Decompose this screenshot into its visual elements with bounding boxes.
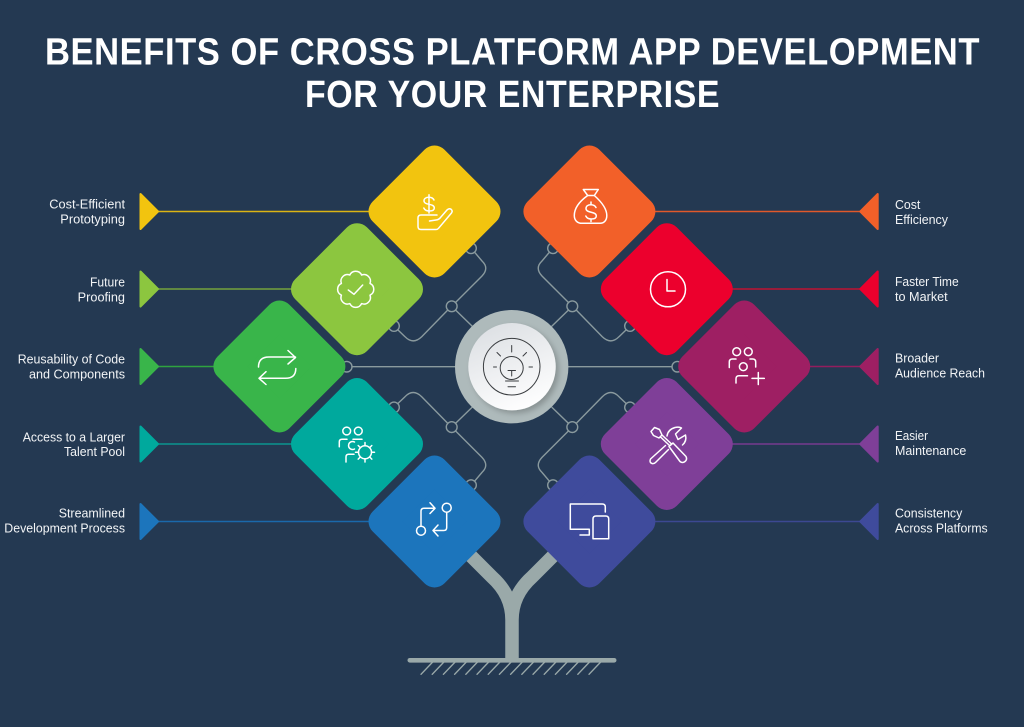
- icon: process flow: [416, 503, 451, 536]
- label: [78, 276, 125, 305]
- arrow marker: [140, 272, 158, 306]
- icon: crossed tools: [650, 427, 687, 464]
- icon: people with plus: [729, 348, 764, 384]
- item: Streamlined Development Process: [4, 470, 487, 574]
- leader line: [808, 366, 866, 368]
- label: Audience Reach: [895, 367, 985, 381]
- label: [895, 275, 959, 304]
- diamond: [615, 237, 719, 341]
- arrow marker: [860, 504, 878, 539]
- leader line: [654, 210, 866, 212]
- leader line: [158, 288, 293, 290]
- icon: repeat arrows: [258, 350, 296, 384]
- diamond: [305, 237, 409, 341]
- label: Proofing: [78, 291, 125, 305]
- label: Maintenance: [895, 444, 966, 458]
- diamond: [305, 392, 409, 496]
- label: Consistency: [895, 506, 963, 520]
- label: Broader: [895, 352, 939, 366]
- arrow marker: [860, 272, 878, 306]
- diamond: [537, 160, 641, 264]
- label: Faster Time: [895, 275, 959, 289]
- label: Cost-Efficient: [49, 198, 126, 212]
- item: Faster Time to Market: [615, 237, 959, 341]
- label: and Components: [29, 368, 125, 382]
- label: Talent Pool: [64, 445, 125, 459]
- arrow marker: [140, 504, 158, 539]
- label: [49, 198, 126, 227]
- title: [45, 32, 980, 116]
- icon: lightbulb: [483, 338, 540, 395]
- arrow marker: [860, 426, 878, 462]
- central hub with lightbulb: [455, 310, 568, 423]
- item: Reusability of Code and Components: [18, 314, 331, 418]
- item: Future Proofing: [78, 237, 409, 341]
- leader line: [158, 443, 293, 445]
- arrow marker: [140, 426, 158, 462]
- icon: devices: [570, 504, 609, 539]
- arrow marker: [860, 349, 878, 384]
- leader line: [158, 366, 215, 368]
- item: Consistency Across Platforms: [537, 470, 988, 574]
- item: Broader Audience Reach: [692, 314, 985, 418]
- label: Reusability of Code: [18, 353, 125, 367]
- item: Cost Efficiency: [537, 160, 949, 264]
- icon: hand with dollar: [418, 195, 452, 230]
- icon: money bag: [574, 190, 607, 223]
- diamond: [615, 392, 719, 496]
- label: Efficiency: [895, 213, 949, 227]
- icon: people with gear: [339, 427, 374, 462]
- label: [18, 353, 125, 382]
- label: Prototyping: [60, 213, 125, 227]
- label: Future: [90, 276, 125, 290]
- leader line: [731, 288, 866, 290]
- item: Easier Maintenance: [615, 392, 966, 496]
- label: [895, 506, 988, 535]
- label: Across Platforms: [895, 521, 988, 535]
- diamond: [537, 470, 641, 574]
- label: [895, 352, 985, 381]
- icon: badge check: [338, 271, 374, 307]
- label: Streamlined: [59, 506, 125, 520]
- tree trunk and ground: [408, 556, 616, 674]
- item: Access to a Larger Talent Pool: [23, 392, 409, 496]
- icon: clock: [650, 272, 686, 307]
- label: to Market: [895, 290, 948, 304]
- connector network: [341, 243, 683, 490]
- label: Cost: [895, 198, 921, 212]
- diamond: [692, 314, 796, 418]
- arrow marker: [140, 194, 158, 229]
- leader line: [654, 520, 866, 522]
- label: [23, 430, 125, 459]
- diamond: [227, 314, 331, 418]
- label: Access to a Larger: [23, 430, 125, 444]
- label: [895, 198, 949, 227]
- label: Easier: [895, 429, 928, 443]
- leader line: [731, 443, 866, 445]
- label: [895, 429, 966, 458]
- arrow marker: [140, 349, 158, 384]
- diamond: [382, 470, 486, 574]
- item: Cost-Efficient Prototyping: [49, 160, 487, 264]
- leader line: [158, 520, 370, 522]
- label: Development Process: [4, 521, 125, 535]
- arrow marker: [860, 194, 878, 229]
- label: [4, 506, 125, 535]
- diamond: [382, 160, 486, 264]
- title: FOR YOUR ENTERPRISE: [305, 74, 720, 116]
- leader line: [158, 210, 370, 212]
